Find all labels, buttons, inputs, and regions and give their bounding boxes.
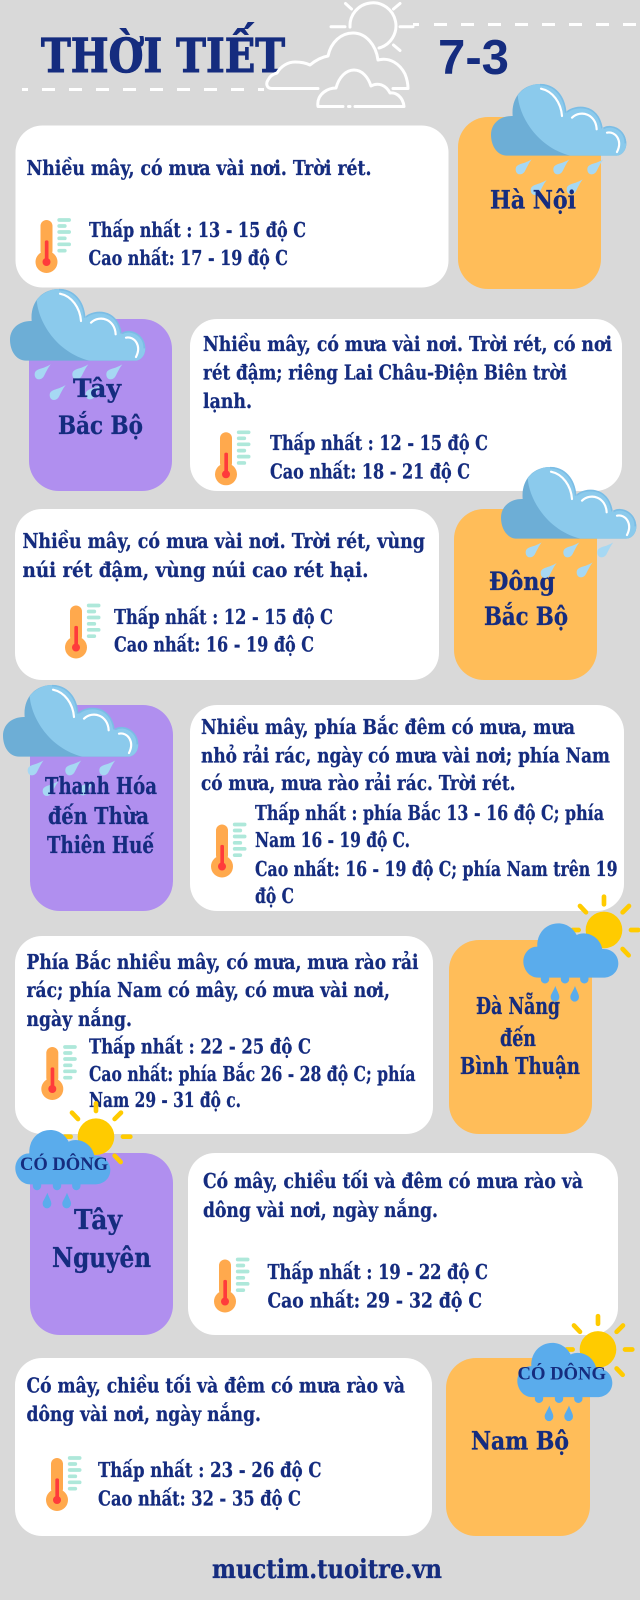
panel: Đông Bắc Bộ forecast — [15, 509, 439, 680]
forecast text — [203, 1169, 583, 1222]
temperatures: Cao nhất: 17 - 19 độ C — [88, 246, 288, 270]
icon: rain cloud — [501, 467, 636, 578]
temperatures: Thấp nhất : 12 - 15 độ C — [114, 605, 333, 629]
panel: Đà Nẵng đến Bình Thuận forecast — [15, 936, 433, 1134]
footer: muctim.tuoitre.vn — [212, 1555, 442, 1585]
temperatures — [114, 605, 333, 656]
forecast text: Nhiều mây, phía Bắc đêm có mưa, mưa — [201, 715, 575, 739]
temperatures: Thấp nhất : 12 - 15 độ C — [270, 431, 488, 455]
icon: thermometer — [211, 824, 245, 877]
panel: Hà Nội label — [458, 84, 626, 289]
region name: Thanh Hóa — [45, 773, 157, 800]
region name: Đà Nẵng — [476, 993, 560, 1020]
panel: Đông Bắc Bộ label — [454, 467, 636, 680]
forecast text — [26, 950, 418, 1031]
panel: Nam Bộ label — [446, 1316, 632, 1536]
forecast text — [22, 529, 425, 582]
temperatures: Nam 29 - 31 độ c. — [89, 1088, 241, 1112]
forecast text: núi rét đậm, vùng núi cao rét hại. — [22, 558, 368, 582]
temperatures: Cao nhất: 29 - 32 độ C — [268, 1288, 482, 1312]
temperatures — [255, 801, 618, 908]
forecast text: Phía Bắc nhiều mây, có mưa, mưa rào rải — [26, 950, 418, 974]
panel: Tây Bắc Bộ label — [10, 289, 172, 491]
icon: rain cloud — [491, 84, 626, 195]
panel: Tây Nguyên forecast — [188, 1153, 618, 1335]
region name: Tây — [74, 1205, 123, 1236]
icon: thermometer — [215, 432, 249, 485]
temperatures — [268, 1260, 488, 1312]
icon: thermometer — [41, 1047, 75, 1100]
panel: Tây Bắc Bộ forecast — [190, 319, 622, 491]
region name — [58, 374, 143, 441]
region name: đến Thừa — [48, 803, 149, 830]
region name: Thiên Huế — [47, 832, 155, 859]
region name: Nam Bộ — [471, 1426, 569, 1456]
forecast text: dông vài nơi, ngày nắng. — [26, 1402, 261, 1426]
region name — [52, 1205, 151, 1274]
date: 7-3 — [438, 31, 509, 85]
region name: đến — [500, 1025, 536, 1052]
region name — [45, 773, 157, 859]
forecast text — [203, 332, 612, 413]
temperatures: Thấp nhất : 23 - 26 độ C — [98, 1458, 322, 1482]
storm note: CÓ DÔNG — [518, 1362, 606, 1384]
temperatures — [89, 1034, 416, 1112]
forecast text: có mưa, mưa rào rải rác. Trời rét. — [201, 771, 516, 795]
forecast text — [201, 715, 610, 795]
temperatures: Cao nhất: phía Bắc 26 - 28 độ C; phía — [89, 1062, 416, 1086]
temperatures — [88, 218, 306, 270]
region name — [484, 567, 568, 632]
icon: thermometer — [36, 220, 69, 273]
icon: sun and storm cloud — [15, 1103, 130, 1208]
temperatures: Cao nhất: 16 - 19 độ C — [114, 632, 314, 656]
panel: Đà Nẵng đến Bình Thuận label — [449, 897, 638, 1134]
temperatures: Thấp nhất : 22 - 25 độ C — [89, 1034, 311, 1058]
panel: Nam Bộ forecast — [15, 1358, 432, 1536]
region name: Hà Nội — [490, 186, 576, 216]
forecast text: nhỏ rải rác, ngày có mưa vài nơi; phía Nam — [201, 744, 610, 768]
temperatures: độ C — [255, 884, 294, 908]
icon: thermometer — [46, 1458, 80, 1511]
icon: rain cloud — [3, 685, 138, 796]
title: THỜI TIẾT — [41, 22, 285, 83]
region name: Bình Thuận — [460, 1053, 580, 1080]
icon: thermometer — [214, 1260, 248, 1312]
forecast text — [26, 1374, 405, 1426]
forecast text: Có mây, chiều tối và đêm có mưa rào và — [26, 1374, 405, 1398]
panel: Thanh Hóa đến Thừa Thiên Huế label — [3, 685, 173, 911]
forecast text: ngày nắng. — [26, 1007, 132, 1031]
temperatures — [270, 431, 488, 484]
icon: thermometer — [65, 606, 99, 658]
temperatures: Nam 16 - 19 độ C. — [255, 828, 410, 852]
region name: Nguyên — [52, 1243, 151, 1274]
icon: sun and clouds outline with dashed lines — [22, 3, 640, 107]
forecast text: rét đậm; riêng Lai Châu-Điện Biên trời — [203, 360, 567, 384]
region name — [460, 993, 580, 1080]
forecast text: Nhiều mây, có mưa vài nơi. Trời rét. — [26, 156, 372, 180]
icon: sun and rain cloud — [523, 897, 638, 1002]
panel: Thanh Hóa đến Thừa Thiên Huế forecast — [190, 705, 624, 911]
forecast text: Có mây, chiều tối và đêm có mưa rào và — [203, 1169, 583, 1193]
region name: Bắc Bộ — [58, 410, 143, 441]
region name: Đông — [489, 567, 555, 597]
panel: Hà Nội forecast — [16, 126, 448, 288]
panel: Tây Nguyên label — [15, 1103, 173, 1335]
forecast text: Nhiều mây, có mưa vài nơi. Trời rét, vùng — [22, 529, 425, 553]
forecast text: lạnh. — [203, 389, 252, 413]
region name: Bắc Bộ — [484, 601, 568, 632]
forecast text: dông vài nơi, ngày nắng. — [203, 1198, 438, 1222]
temperatures: Cao nhất: 32 - 35 độ C — [98, 1486, 301, 1510]
icon: rain cloud — [10, 289, 145, 400]
storm note: CÓ DÔNG — [20, 1153, 108, 1175]
temperatures: Cao nhất: 18 - 21 độ C — [270, 460, 470, 484]
temperatures — [98, 1458, 322, 1510]
temperatures: Thấp nhất : 19 - 22 độ C — [268, 1260, 488, 1284]
forecast text: Nhiều mây, có mưa vài nơi. Trời rét, có nơi — [203, 332, 612, 356]
forecast text: rác; phía Nam có mây, có mưa vài nơi, — [26, 978, 390, 1002]
icon: sun and storm cloud — [517, 1316, 632, 1421]
temperatures: Thấp nhất : 13 - 15 độ C — [89, 218, 306, 242]
region name: Tây — [73, 374, 122, 404]
